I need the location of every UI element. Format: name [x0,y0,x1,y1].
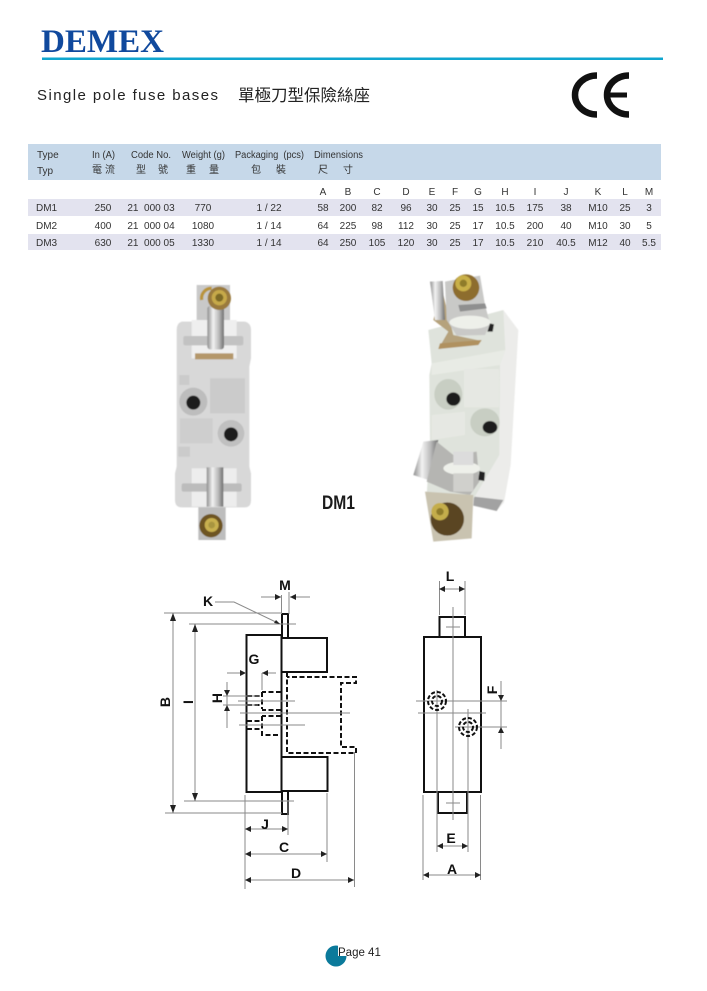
row DM2: 400 [95,221,112,232]
row DM1: 3 [646,203,652,214]
row DM1: 21 000 03 [127,203,175,214]
dimension letters row: C [373,187,381,198]
row DM1: 96 [400,203,412,214]
row DM3: 10.5 [495,238,515,249]
dimension letters row: I [534,187,536,198]
table header: Chinese: 寸 [343,163,353,176]
dimension letters row: K [595,187,602,198]
heading: product title: 單極刀型保險絲座 [238,82,370,106]
row DM2: 17 [472,221,484,232]
dimension labels: C [279,839,289,855]
row DM2: 30 [426,221,438,232]
dimension letters row: D [402,187,410,198]
row DM1: M10 [588,203,608,214]
table header: English: Packaging (pcs) [235,150,304,161]
row DM3: 1330 [192,238,215,249]
row DM1: 82 [371,203,383,214]
table header: Chinese: 重 [186,163,196,176]
row DM2: 1080 [192,221,215,232]
row DM2: 200 [527,221,544,232]
row DM3: 40 [619,238,631,249]
table header: Chinese: 裝 [276,163,286,176]
dimension letters row: H [501,187,509,198]
row DM3: 5.5 [642,238,656,249]
row DM1: 250 [95,203,112,214]
table header: Chinese: 量 [209,164,219,176]
leader and extension lines [164,592,354,889]
table row stripe: DM1 [28,199,661,216]
header rule [42,58,663,60]
dimension labels [157,577,301,881]
row DM2 [36,221,652,232]
row DM1: 58 [317,203,329,214]
diagram: side view with dimensions [157,577,356,889]
row DM3: 250 [340,238,357,249]
dimension letters row: J [564,187,568,198]
row DM2: 112 [398,221,414,232]
row DM2: 10.5 [495,221,515,232]
row DM3: 17 [472,238,484,249]
row DM1: DM1 [36,203,58,214]
row DM3: 630 [95,238,112,249]
table header: Chinese: 流 [105,163,115,176]
row DM2: 40 [560,221,572,232]
row DM3: DM3 [36,238,58,249]
table header: Chinese: 號 [158,163,168,176]
table header: English: Code No. [131,150,171,161]
table header band [28,144,661,180]
dimension labels: J [261,816,269,832]
dimension letters row: B [345,187,352,198]
dimension labels: B [157,697,173,707]
row DM1: 30 [426,203,438,214]
row DM1: 770 [195,203,212,214]
table header: English [37,150,363,161]
table header: Chinese: 電 [92,164,102,176]
row DM2: 5 [646,221,652,232]
dimension letters row: F [452,187,458,198]
hidden mounting holes [428,692,477,736]
dimension labels: G [249,651,260,667]
brand logo: DEMEX: DEMEX [41,24,164,60]
photo: fuse base angled view [413,274,518,542]
hidden screw pockets [247,692,281,735]
dimension labels: A [447,861,457,877]
page number badge [326,943,381,966]
row DM3: 105 [369,238,386,249]
dimension labels: K [203,593,213,609]
row DM3: 210 [527,238,544,249]
table header: English: In (A) [92,150,115,161]
row DM1: 175 [527,203,544,214]
row DM1: 25 [619,203,631,214]
row DM2: M10 [588,221,608,232]
row DM3: 40.5 [556,238,576,249]
photo: fuse base front view [175,285,251,540]
row DM2: 30 [619,221,631,232]
dimension labels: I [180,700,196,704]
row DM3: M12 [588,238,608,249]
table header: English: Weight (g) [182,150,225,161]
dimension arrowheads [170,594,354,883]
table header: Chinese: 包 [251,163,261,176]
row DM1 [36,203,652,214]
specification table [28,144,661,250]
table header: Chinese [37,163,353,177]
row DM2: 98 [371,221,383,232]
row DM3: 21 000 05 [127,238,175,249]
table header: English: Dimensions [314,150,363,161]
table row stripe: DM3 [28,234,661,250]
dimension labels: F [484,685,500,694]
row DM2: DM2 [36,221,58,232]
table header: Chinese: 型 [136,163,146,176]
row DM2: 21 000 04 [127,221,175,232]
row DM1: 25 [449,203,461,214]
row DM2: 25 [449,221,461,232]
icon: CE mark [575,76,629,114]
dimension labels: L [446,568,455,584]
row DM1: 200 [340,203,357,214]
row DM1: 1 / 22 [256,203,282,214]
diagram: front view with dimensions [416,568,507,880]
side view outline [246,614,356,814]
row DM3: 30 [426,238,438,249]
dimension labels [446,568,500,877]
row DM3: 64 [317,238,329,249]
page number badge: Page 41 [338,947,381,959]
row DM3 [36,238,656,249]
dimension letters row [320,187,653,198]
table header: Chinese: 尺 [318,165,328,176]
heading: product title: Single pole fuse bases [37,87,218,104]
row DM3: 25 [449,238,461,249]
row DM1: 38 [560,203,572,214]
row DM3: 120 [398,238,415,249]
front view outline [424,617,481,813]
dimension labels: D [291,865,301,881]
row DM1: 10.5 [495,203,515,214]
dimension labels: M [279,577,291,593]
heading: product title [37,82,370,106]
table header: English: Type [37,150,59,161]
centre and extension lines [416,581,507,880]
model label: DM1: DM1 [322,493,355,514]
dimension letters row: M [645,187,653,198]
row DM3: 1 / 14 [256,238,282,249]
dimension labels: E [446,830,456,846]
dimension letters row: A [320,187,327,198]
dimension labels: H [209,693,225,703]
dimension letters row: E [429,187,436,198]
dimension arrowheads [423,586,504,878]
row DM1: 15 [472,203,484,214]
table header: Chinese: Typ [37,166,54,177]
dimension letters row: L [622,187,628,198]
row DM2: 1 / 14 [256,221,282,232]
row DM2: 64 [317,221,329,232]
row DM2: 225 [340,221,357,232]
dimension letters row: G [474,187,482,198]
